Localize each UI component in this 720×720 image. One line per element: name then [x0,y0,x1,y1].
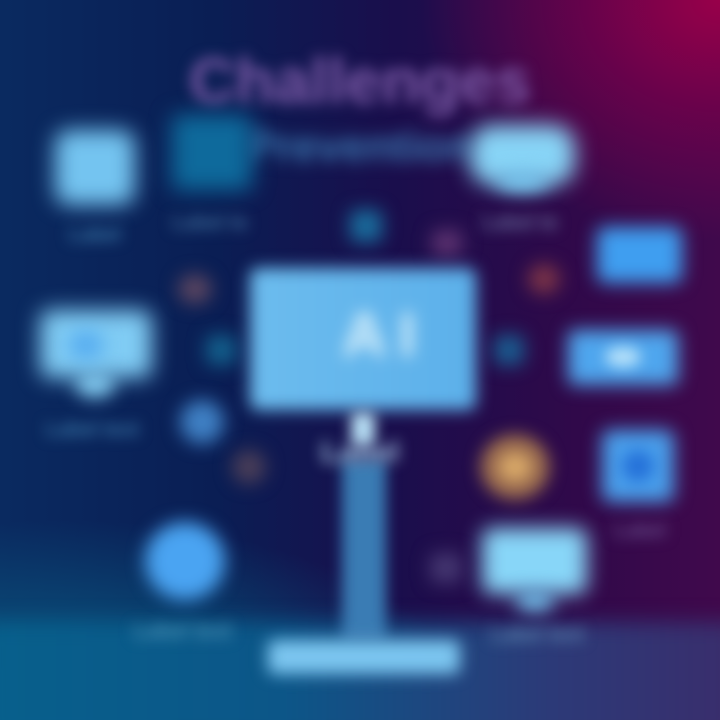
title: Challenges [189,45,531,117]
icon: left monitor [40,310,152,378]
icon: top left laptop [55,130,135,205]
label: top right: Label te [482,212,558,234]
dot 3 [178,274,212,304]
icon: top centre-left square [172,115,252,190]
dot 4 [528,264,560,294]
icon: right lower square centre [622,450,654,482]
icon: bottom right monitor base [515,590,555,612]
icon: left monitor tail [75,370,115,398]
stand neck [351,412,375,446]
bottom band [0,622,720,720]
icon: speech bubble tail [495,170,550,192]
icon: right wide card highlight [605,347,641,367]
dot 6 [494,335,524,365]
icon: right wide card [568,330,678,385]
dot 7 [180,400,224,444]
subtitle: Prevention [246,122,474,171]
stand pole [342,460,386,640]
icon: right lower square [602,430,674,502]
stand base [268,640,460,674]
icon: bottom left circle [145,522,225,600]
label: bottom right: Label text [491,624,584,646]
icon: orange circle [480,434,550,500]
caption near stand: Label [321,436,399,469]
dot 2 [432,230,462,256]
label: right lower: Label [614,520,666,542]
icon: left monitor centre [68,330,104,360]
label: top left: Label [69,224,121,246]
icon: top right speech bubble [470,125,575,185]
icon: right card [597,227,682,283]
icon: orange circle centre [498,452,532,482]
label: left: Label text [46,419,139,441]
dot 1 [350,210,382,242]
dot 8 [232,450,266,484]
label: bottom left: Label text [134,620,232,643]
label: top centre-left: Label te [172,212,248,234]
AI label: AI [342,301,428,370]
dot 9 [430,553,462,583]
central AI screen [250,268,476,410]
icon: bottom right monitor [482,528,587,594]
dot 5 [206,335,236,365]
